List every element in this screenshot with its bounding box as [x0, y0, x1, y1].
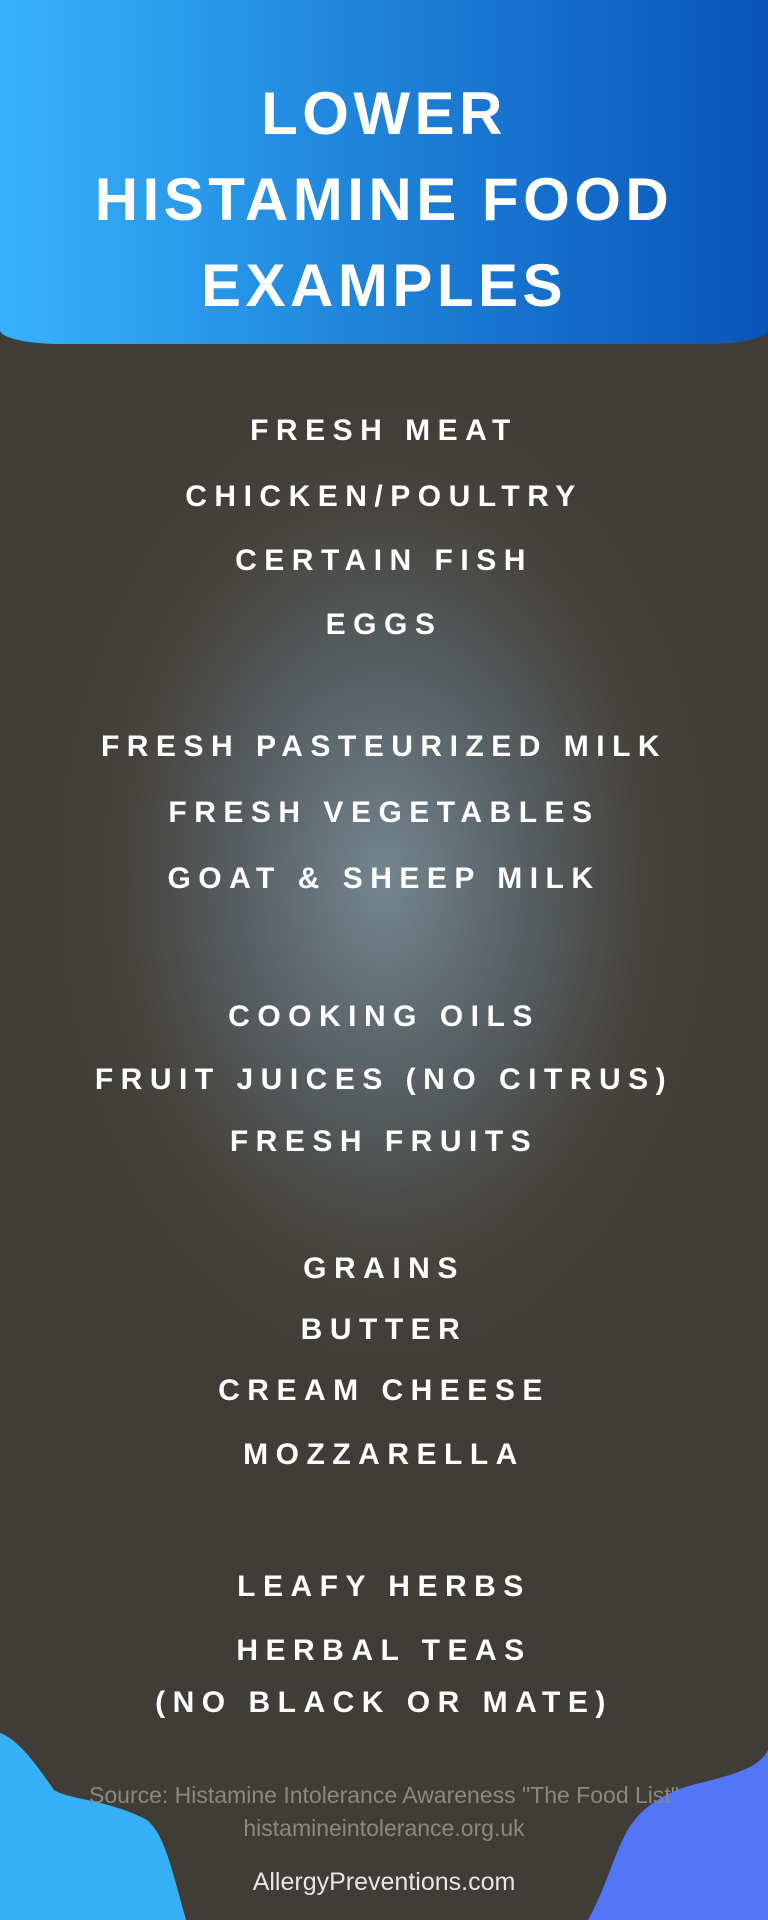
food list: (NO BLACK OR MATE): [155, 1686, 613, 1719]
source text: histamineintolerance.org.uk: [243, 1815, 525, 1841]
food list: CERTAIN FISH: [235, 544, 533, 577]
food list: HERBAL TEAS: [236, 1634, 532, 1667]
title: [95, 80, 673, 319]
title: EXAMPLES: [201, 252, 567, 319]
header banner: [0, 0, 768, 344]
food list: LEAFY HERBS: [237, 1570, 531, 1603]
title: HISTAMINE FOOD: [95, 166, 673, 233]
food list: CHICKEN/POULTRY: [185, 480, 583, 513]
website credit: AllergyPreventions.com: [253, 1868, 515, 1896]
food list: FRESH FRUITS: [230, 1125, 538, 1158]
food list: COOKING OILS: [228, 1000, 540, 1033]
food list: FRUIT JUICES (NO CITRUS): [95, 1063, 673, 1096]
food list: BUTTER: [301, 1313, 467, 1346]
title: LOWER: [261, 80, 507, 147]
food list: MOZZARELLA: [243, 1438, 525, 1471]
food list: FRESH PASTEURIZED MILK: [101, 730, 667, 763]
food list: FRESH VEGETABLES: [168, 796, 600, 829]
food list: FRESH MEAT: [250, 414, 518, 447]
food list: CREAM CHEESE: [218, 1374, 550, 1407]
source text: Source: Histamine Intolerance Awareness "The Food List": [89, 1782, 679, 1808]
food list: GOAT & SHEEP MILK: [167, 862, 601, 895]
source text: [89, 1782, 679, 1841]
food list: EGGS: [326, 608, 442, 641]
food list: GRAINS: [303, 1252, 465, 1285]
food list: [95, 414, 673, 1719]
